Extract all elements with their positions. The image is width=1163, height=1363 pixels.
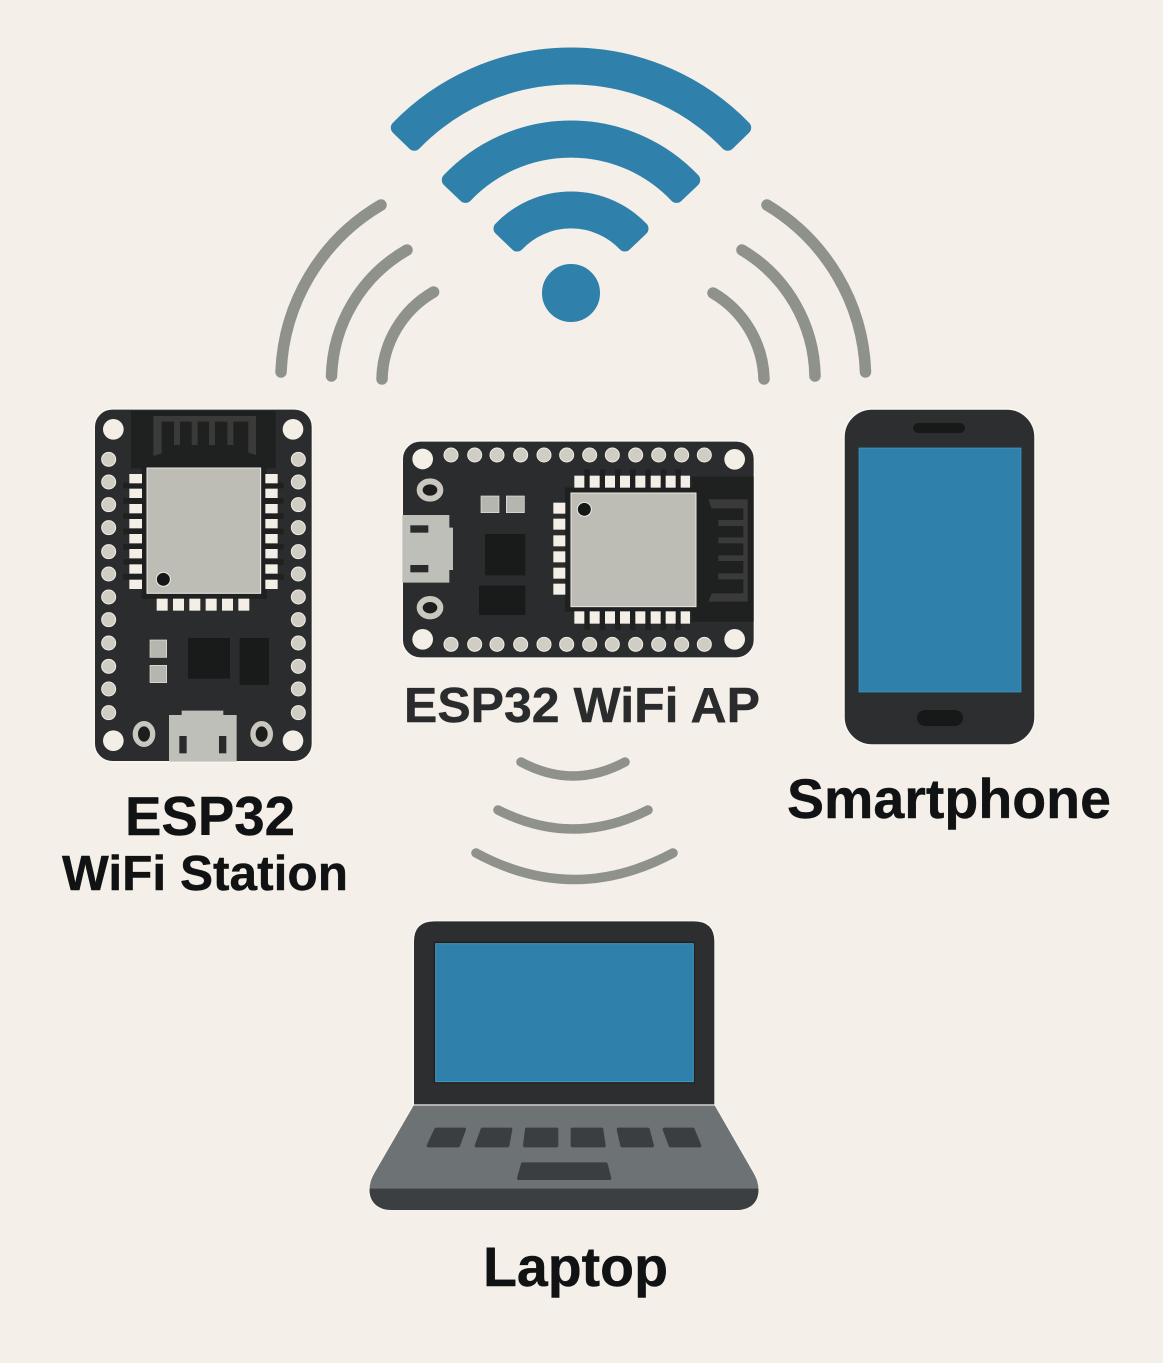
icon: signal arcs toward laptop xyxy=(476,762,673,880)
label: ESP32 WiFi Station xyxy=(62,785,348,901)
label: ESP32 WiFi Station: WiFi Station xyxy=(62,846,348,901)
label: Smartphone: Smartphone xyxy=(787,768,1111,830)
device: ESP32 WiFi station board xyxy=(94,409,312,762)
label: ESP32 WiFi Station: ESP32 xyxy=(125,785,295,847)
device: smartphone xyxy=(844,409,1035,745)
icon: signal arcs toward ESP32 station xyxy=(281,205,434,379)
icon: signal arcs toward smartphone xyxy=(713,205,866,379)
icon: central WiFi symbol xyxy=(398,54,744,315)
label: ESP32 WiFi AP: ESP32 WiFi AP xyxy=(404,678,760,733)
device: laptop xyxy=(369,921,759,1210)
label: Laptop: Laptop xyxy=(483,1236,668,1298)
device: ESP32 WiFi access point board xyxy=(402,441,754,658)
